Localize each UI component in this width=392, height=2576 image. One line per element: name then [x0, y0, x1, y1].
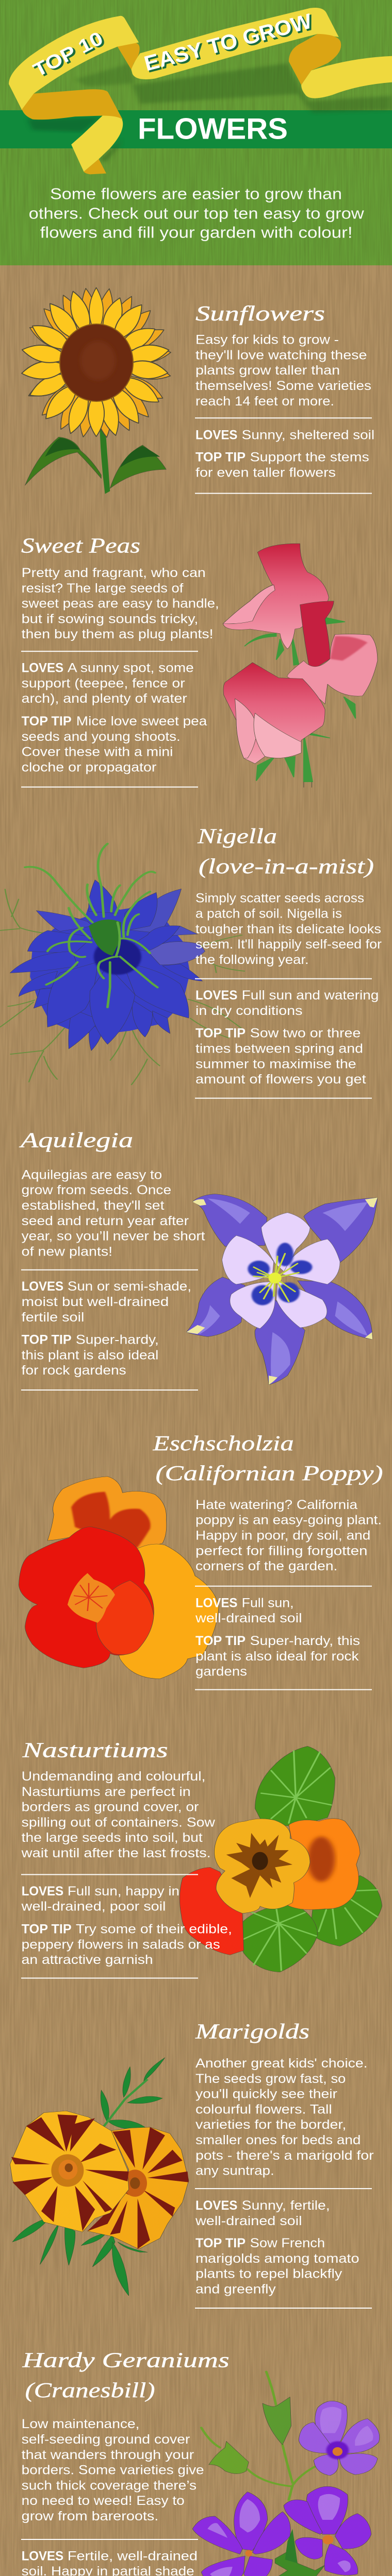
top tip: Cover these with a mini [22, 745, 173, 759]
description: a patch of soil. Nigella is [195, 907, 342, 921]
top tip: Sow French [250, 2236, 325, 2250]
loves: LOVES [22, 2549, 63, 2563]
panel: nigella [0, 824, 382, 1099]
description: no need to weed! Easy to [22, 2494, 185, 2508]
description: borders as ground cover, or [22, 1800, 199, 1815]
loves [22, 1279, 191, 1325]
description: seem. It'll happily self-seed for [195, 937, 382, 952]
top tip: Super-hardy, this [250, 1634, 360, 1648]
illustration: marigolds [10, 2058, 189, 2296]
title band: flowers: FLOWERS [138, 112, 288, 145]
description: colourful flowers. Tall [195, 2102, 332, 2116]
description: you'll quickly see their [195, 2087, 337, 2102]
description: the following year. [195, 953, 309, 967]
loves [195, 1596, 302, 1625]
description: Undemanding and colourful, [22, 1769, 205, 1784]
top tip: times between spring and [195, 1042, 363, 1056]
top tip [195, 1634, 360, 1679]
top tip [195, 1026, 366, 1087]
description: poppy is an easy-going plant. [195, 1513, 382, 1528]
top tip [195, 2236, 359, 2297]
loves: Full sun, [242, 1596, 294, 1610]
loves [21, 1884, 179, 1914]
top tip: this plant is also ideal [22, 1348, 158, 1362]
description: of new plants! [22, 1244, 112, 1259]
description: sweet peas are easy to handle, [22, 597, 219, 611]
loves: moist but well-drained [22, 1295, 169, 1309]
illustration: sunflower [21, 287, 172, 494]
description: seed and return year after [22, 1214, 189, 1228]
description: any suntrap. [195, 2164, 274, 2178]
top tip: for rock gardens [22, 1363, 126, 1378]
heading [152, 1431, 383, 1485]
description: Simply scatter seeds across [195, 891, 364, 906]
loves: A sunny spot, some [68, 660, 194, 675]
top tip: Sow two or three [250, 1026, 361, 1041]
description: The seeds grow fast, so [195, 2072, 346, 2086]
loves [195, 428, 374, 442]
heading: Hardy Geraniums [22, 2348, 230, 2372]
description: themselves! Some varieties [195, 379, 371, 393]
description: resist? The large seeds of [22, 581, 183, 596]
top tip: TOP TIP [195, 2236, 246, 2250]
loves: LOVES [195, 2198, 237, 2213]
ribbon text: top 10: TOP 10 [32, 28, 108, 82]
loves [22, 660, 194, 706]
ribbon banner [9, 8, 392, 174]
description: varieties for the border, [195, 2117, 346, 2132]
description: smaller ones for beds and [195, 2133, 361, 2147]
description: perfect for filling forgotten [195, 1544, 367, 1558]
ribbon text: easy to grow: EASY TO GROW [142, 9, 315, 76]
top tip: seeds and young shoots. [22, 730, 181, 744]
top tip: peppery flowers in salads or as [22, 1937, 220, 1952]
panel: sunflowers [21, 287, 374, 494]
description [22, 1167, 205, 1259]
description: self-seeding ground cover [22, 2432, 190, 2447]
loves: Sun or semi-shade, [68, 1279, 191, 1294]
description: pots - there's a marigold for [195, 2148, 374, 2163]
intro text: others. Check out our top ten easy to grow [29, 204, 364, 222]
description: corners of the garden. [195, 1559, 337, 1573]
loves: well-drained soil [195, 1611, 302, 1625]
description: but if sowing sounds tricky, [22, 612, 198, 626]
loves: LOVES [22, 660, 63, 675]
description: then buy them as plug plants! [22, 627, 213, 641]
loves: LOVES [195, 1596, 237, 1610]
description [195, 2056, 374, 2178]
top tip: gardens [195, 1665, 247, 1679]
illustration: nigella [0, 844, 245, 1085]
description: Happy in poor, dry soil, and [195, 1528, 370, 1543]
illustration: californian poppy [19, 1477, 219, 1679]
description: tougher than its delicate looks [195, 922, 381, 936]
panel: hardy geraniums [21, 2348, 380, 2576]
description: borders. Some varieties give [22, 2463, 204, 2478]
description: they'll love watching these [195, 348, 367, 362]
description [22, 2417, 204, 2523]
intro text: flowers and fill your garden with colour! [40, 224, 353, 242]
loves: LOVES [195, 988, 237, 1003]
title band: flowers [0, 110, 392, 148]
top tip: for even taller flowers [195, 465, 336, 480]
loves: well-drained, poor soil [21, 1900, 166, 1914]
description: Pretty and fragrant, who can [22, 566, 206, 580]
loves: LOVES [22, 1884, 63, 1899]
top tip: plant is also ideal for rock [195, 1649, 359, 1664]
loves: arch), and plenty of water [22, 691, 187, 706]
loves: LOVES [195, 428, 237, 442]
description: Aquilegias are easy to [22, 1167, 162, 1182]
heading: (Californian Poppy) [156, 1461, 383, 1485]
description: spilling out of containers. Sow [22, 1815, 216, 1829]
top tip [22, 714, 207, 774]
description [195, 891, 382, 967]
loves: fertile soil [22, 1310, 84, 1325]
loves: Full sun, happy in [68, 1884, 179, 1899]
top tip: Mice love sweet pea [76, 714, 207, 728]
heading: Eschscholzia [152, 1431, 294, 1455]
heading [197, 824, 374, 878]
loves: Sunny, sheltered soil [242, 428, 374, 442]
description: Nasturtiums are perfect in [22, 1785, 191, 1799]
loves: Sunny, fertile, [242, 2198, 330, 2213]
top tip [22, 1333, 159, 1378]
ribbon text: top 10: TOP 10 [30, 27, 106, 81]
loves: support (teepee, fence or [22, 676, 185, 690]
loves [22, 2549, 198, 2576]
top tip: TOP TIP [195, 450, 246, 465]
top tip: TOP TIP [22, 1333, 72, 1347]
top tip: TOP TIP [195, 1026, 246, 1041]
heading: (Cranesbill) [25, 2378, 155, 2402]
ribbon text: easy to grow: EASY TO GROW [143, 10, 316, 77]
loves [195, 988, 379, 1018]
top tip: Try some of their edible, [76, 1922, 232, 1936]
heading: Nasturtiums [22, 1738, 168, 1762]
panel: aquilegia [19, 1128, 378, 1391]
top tip [195, 450, 369, 480]
loves: Full sun and watering [242, 988, 379, 1003]
loves: in dry conditions [195, 1004, 302, 1018]
loves: well-drained soil [195, 2214, 302, 2228]
illustration: nasturtiums [179, 1746, 382, 1972]
heading: (love-in-a-mist) [199, 854, 374, 878]
description: Low maintenance, [22, 2417, 140, 2431]
description: established, they'll set [22, 1198, 165, 1213]
panel: header [0, 8, 392, 242]
loves: Fertile, well-drained [68, 2549, 198, 2563]
top tip: plants to repel blackfly [195, 2267, 342, 2281]
top tip: TOP TIP [22, 714, 72, 728]
description: Easy for kids to grow - [195, 333, 339, 347]
top tip: summer to maximise the [195, 1057, 356, 1071]
description: wait until after the last frosts. [21, 1846, 211, 1860]
description [195, 1498, 382, 1573]
illustration: sweet peas [223, 544, 378, 788]
description: the large seeds into soil, but [22, 1831, 203, 1845]
heading: Marigolds [195, 2019, 309, 2043]
panel: sweet peas [21, 534, 378, 788]
loves [195, 2198, 330, 2228]
illustration: hardy geraniums [192, 2371, 380, 2576]
top tip: Super-hardy, [76, 1333, 159, 1347]
top tip: an attractive garnish [22, 1953, 153, 1967]
description: Hate watering? California [195, 1498, 357, 1512]
intro text: Some flowers are easier to grow than [50, 184, 342, 203]
heading: Sunflowers [195, 301, 325, 325]
heading [22, 2348, 230, 2402]
description [21, 1769, 216, 1860]
illustration: aquilegia [186, 1194, 378, 1384]
description: year, so you’ll never be short [22, 1229, 205, 1244]
description [22, 566, 219, 641]
heading: Nigella [197, 824, 277, 848]
top tip: marigolds among tomato [195, 2251, 359, 2266]
panel: eschscholzia [19, 1431, 383, 1690]
top tip: amount of flowers you get [195, 1072, 366, 1087]
top tip: and greenfly [195, 2282, 276, 2297]
panel: nasturtiums [21, 1738, 382, 1978]
top tip: cloche or propagator [22, 760, 156, 774]
top tip: TOP TIP [195, 1634, 246, 1648]
intro text [29, 184, 364, 242]
top tip: TOP TIP [22, 1922, 72, 1936]
description: grow from bareroots. [22, 2509, 158, 2523]
heading: Aquilegia [19, 1128, 133, 1151]
panel: marigolds [10, 2019, 374, 2309]
description [195, 333, 371, 409]
top tip: Support the stems [250, 450, 369, 465]
description: plants grow taller than [195, 363, 340, 378]
description: reach 14 feet or more. [195, 394, 334, 409]
heading: Sweet Peas [21, 534, 140, 557]
loves: LOVES [22, 1279, 63, 1294]
top tip [22, 1922, 232, 1967]
description: that wanders through your [22, 2448, 194, 2462]
description: such thick coverage there’s [22, 2478, 197, 2493]
description: grow from seeds. Once [22, 1183, 171, 1197]
description: Another great kids' choice. [195, 2056, 367, 2071]
